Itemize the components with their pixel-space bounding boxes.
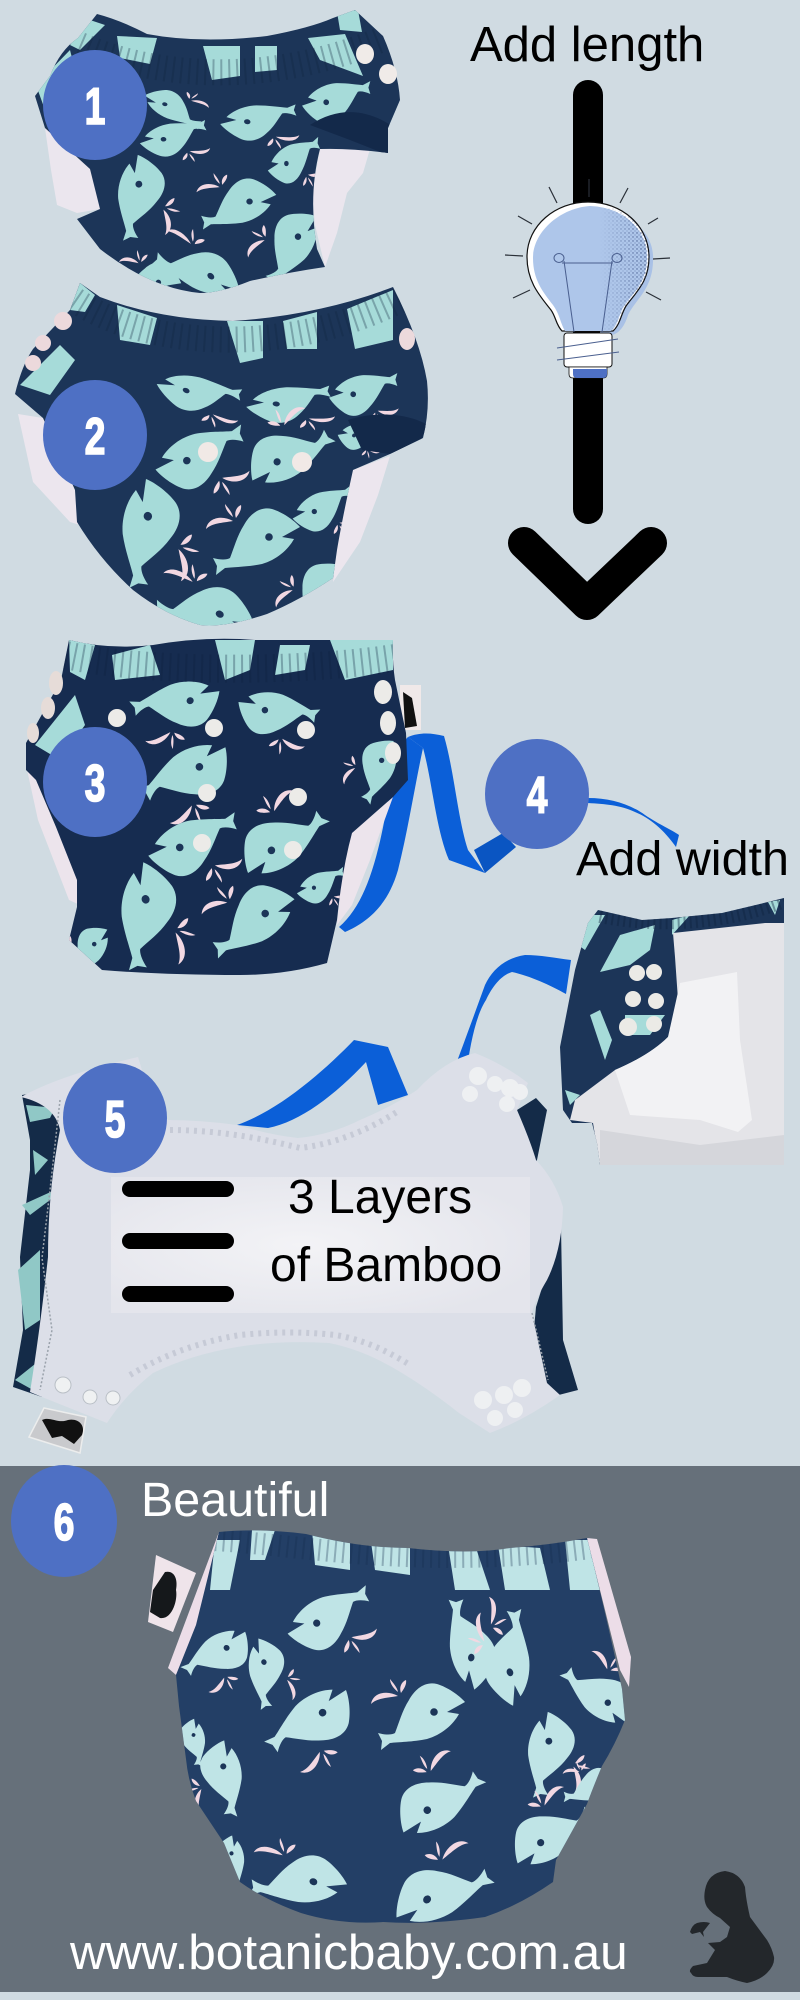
bulb shadow [600, 210, 653, 335]
navy side left [13, 1088, 64, 1397]
diaper 3: tag [400, 685, 421, 730]
length arrow [524, 80, 651, 604]
navy body with whales [35, 10, 400, 293]
number badge 4 [485, 739, 589, 849]
number badge 3: 3 [85, 754, 105, 812]
navy body with whales [15, 283, 428, 626]
white lining [570, 923, 784, 1165]
snaps [356, 44, 397, 84]
navy body with whales [20, 635, 415, 983]
label: 3 layers of bamboo: 3 Layers [288, 1171, 472, 1224]
white lining left and right [45, 128, 370, 267]
lower left snaps [55, 1377, 120, 1405]
pink straps diaper 6 [168, 1532, 631, 1687]
number badge 6: 6 [54, 1493, 74, 1551]
navy side right [517, 1098, 578, 1398]
stipple [600, 205, 649, 331]
absorbent pad [615, 972, 752, 1132]
icon: light bulb [505, 179, 670, 378]
blue ribbon: upper ribbon from diaper 3 to circle 4 [339, 734, 679, 932]
top snaps [462, 1067, 528, 1112]
filament [554, 254, 622, 332]
number badge 5 [63, 1063, 167, 1173]
tag [29, 1408, 86, 1453]
diaper 5: opened nappy interior [13, 1053, 578, 1453]
heading: add length: Add length [470, 18, 704, 72]
number badge 4: 4 [527, 766, 547, 824]
diaper 3: nappy rear with snaps [20, 635, 415, 983]
diaper 1: whale print nappy [35, 10, 400, 293]
teal patches [15, 1105, 55, 1395]
website url: www.botanicbaby.com.au [69, 1925, 628, 1980]
label: 3 layers of bamboo: of Bamboo [270, 1239, 502, 1292]
three layer bars [122, 1181, 234, 1302]
diaper 6 tag [148, 1555, 196, 1632]
label: 3 layers of bamboo [270, 1171, 502, 1292]
snaps [619, 964, 664, 1036]
logo: baby silhouette [690, 1871, 774, 1983]
heading: add width: Add width [576, 832, 789, 886]
diaper 6: beautiful nappy outer [176, 1530, 625, 1923]
number badge 1 [43, 50, 147, 160]
number badge 3 [43, 727, 147, 837]
glass [527, 202, 649, 331]
small photo: width snaps and inner lining [555, 895, 790, 1170]
white interior [21, 1053, 563, 1433]
number badge 2 [43, 380, 147, 490]
stitched edges [40, 1100, 548, 1390]
blue ribbon: lower ribbon from diaper 5 to small photo [237, 955, 571, 1128]
bamboo layer panel [111, 1177, 530, 1313]
number badge 6 [11, 1465, 117, 1577]
number badge 2: 2 [85, 407, 105, 465]
lower right snaps [474, 1379, 531, 1426]
dark footer panel [0, 1466, 800, 1992]
number badge 5: 5 [105, 1090, 125, 1148]
diaper 2: extended length nappy [15, 283, 428, 626]
light rays [505, 179, 670, 300]
screw base [564, 333, 612, 367]
snaps [25, 312, 415, 472]
snaps [27, 671, 401, 859]
white lining left and right [18, 414, 390, 582]
white lining [26, 765, 393, 925]
heading: beautiful: Beautiful [141, 1473, 329, 1527]
number badge 1: 1 [85, 77, 105, 135]
elastic gathers [130, 1110, 410, 1375]
